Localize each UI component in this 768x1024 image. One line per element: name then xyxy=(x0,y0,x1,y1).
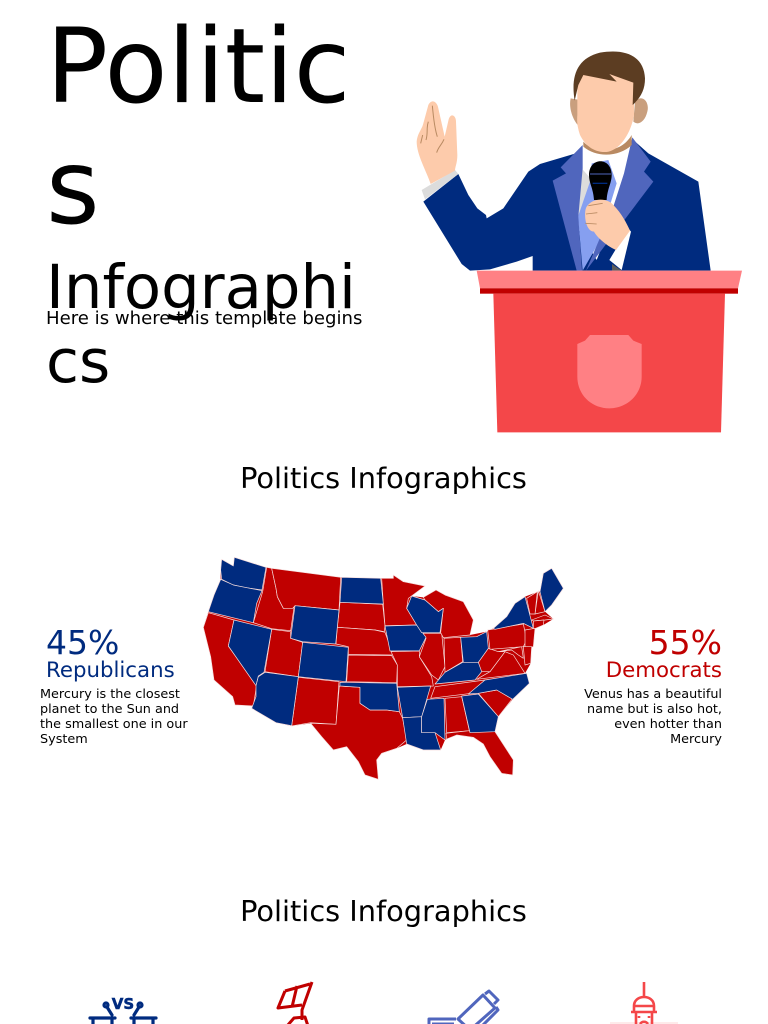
title: Politic xyxy=(46,7,350,127)
democrats description: Venus has a beautiful xyxy=(584,687,722,702)
USA election map xyxy=(203,557,564,780)
republicans description: planet to the Sun and xyxy=(40,702,179,717)
title xyxy=(46,7,356,397)
podium shield xyxy=(577,335,642,408)
democrats description: name but is also hot, xyxy=(587,702,722,717)
microphone xyxy=(589,161,612,200)
podium band xyxy=(480,288,738,294)
democrats description: even hotter than xyxy=(614,717,722,732)
illustration: politician at podium xyxy=(416,52,742,432)
democrats label: Democrats xyxy=(606,658,722,683)
podium top xyxy=(477,271,742,288)
podium body xyxy=(493,294,725,432)
republicans label: Republicans xyxy=(46,658,175,683)
democrats stat xyxy=(584,623,722,747)
republicans percent: 45% xyxy=(46,623,119,662)
politician head xyxy=(570,52,648,155)
democrats percent: 55% xyxy=(649,623,722,662)
politician suit xyxy=(423,137,711,271)
republicans description xyxy=(40,687,188,747)
republican states xyxy=(208,557,563,750)
section heading: icons: Politics Infographics xyxy=(240,894,527,928)
hand holding microphone xyxy=(585,200,631,270)
icon: debate podiums: VS xyxy=(112,995,134,1013)
title: cs xyxy=(46,327,110,397)
title: Infographi xyxy=(46,253,356,323)
democrats description: Mercury xyxy=(670,732,722,747)
raised hand xyxy=(417,101,458,199)
democrat states xyxy=(203,567,553,779)
republicans description: System xyxy=(40,732,88,747)
democrats description xyxy=(584,687,722,747)
republicans description: the smallest one in our xyxy=(40,717,188,732)
republicans stat xyxy=(40,623,188,747)
section heading: map: Politics Infographics xyxy=(240,461,527,495)
republicans description: Mercury is the closest xyxy=(40,687,180,702)
title: s xyxy=(46,128,100,248)
subtitle: Here is where this template begins xyxy=(46,308,362,329)
